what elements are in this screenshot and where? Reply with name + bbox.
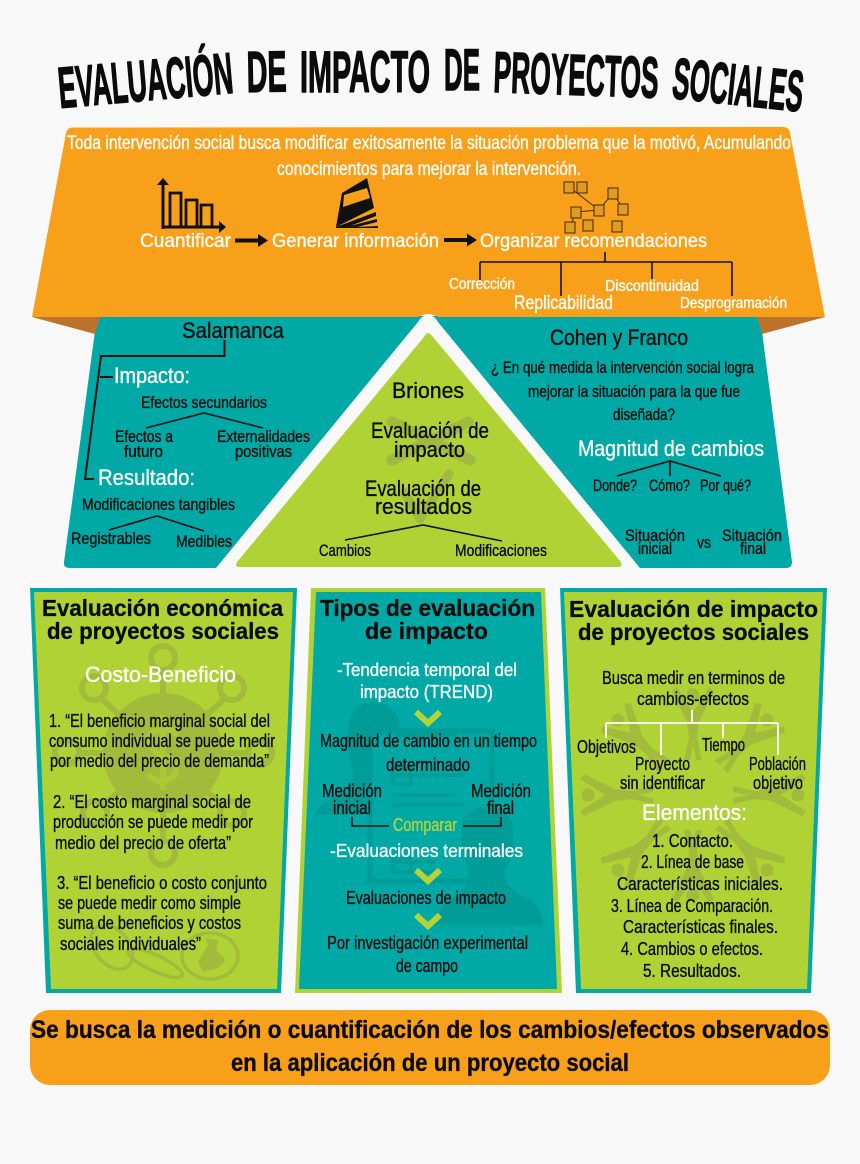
panel: Salamanca text: Modificaciones tangibles xyxy=(82,495,235,514)
heading: Tipos de evaluación xyxy=(320,595,535,621)
tree of factors: Población xyxy=(749,754,806,774)
panel: Salamanca text xyxy=(71,318,310,551)
icon: chevron xyxy=(416,915,440,926)
panel: Cohen y Franco text: vs xyxy=(697,533,711,552)
list item 2: 2. “El costo marginal social de xyxy=(53,792,251,812)
panel: Cohen y Franco text: Situación xyxy=(625,526,685,545)
icon: watermark check xyxy=(404,474,449,519)
icon: watermark people and document xyxy=(315,702,543,925)
elements list: 5. Resultados. xyxy=(643,961,741,981)
list item 2: medio del precio de oferta” xyxy=(55,833,231,853)
panel: Briones triangle: resultados xyxy=(375,494,472,519)
recommendations tree: Discontinuidad xyxy=(605,278,699,295)
panel: Cohen y Franco text: Magnitud de cambios xyxy=(578,436,764,461)
panel: Salamanca text: Registrables xyxy=(71,529,151,548)
panel: Briones triangle: Briones xyxy=(392,378,464,403)
text: investigacion experimental: Por investigación experimental xyxy=(327,933,528,953)
list item 1: 1. “El beneficio marginal social del xyxy=(49,711,270,731)
comparison diagram: Medición xyxy=(322,781,382,801)
panel: teal background with Salamanca and Cohen y Franco xyxy=(64,315,792,568)
comparison diagram xyxy=(322,781,531,835)
text: investigacion experimental: de campo xyxy=(396,956,458,976)
callout: bottom banner: en la aplicación de un proyecto social xyxy=(231,1049,629,1077)
title: DE xyxy=(246,39,287,105)
icon: network of documents xyxy=(564,182,628,233)
recommendations tree: Replicabilidad xyxy=(514,292,613,314)
heading xyxy=(569,596,818,645)
panel: Briones triangle: Modificaciones xyxy=(455,541,547,560)
list item 1: por medio del precio de demanda” xyxy=(50,751,269,771)
tree of factors: Tiempo xyxy=(702,735,745,755)
elements list: 1. Contacto. xyxy=(652,831,733,851)
heading: Evaluación económica xyxy=(42,595,283,621)
list item 3: se puede medir como simple xyxy=(58,893,241,913)
step: organizar recomendaciones: Organizar recomendaciones xyxy=(480,230,707,252)
list item 2 xyxy=(53,792,253,853)
intro text: cambios-efectos xyxy=(637,689,749,709)
panel: Cohen y Franco text: mejorar la situación para la que fue xyxy=(528,382,740,401)
panel: Salamanca text: futuro xyxy=(124,442,163,461)
tree of factors: objetivo xyxy=(753,773,803,793)
panel: Cohen y Franco text: Cohen y Franco xyxy=(550,325,688,350)
elements list: 3. Línea de Comparación. xyxy=(611,896,773,916)
arrow xyxy=(235,234,268,247)
text: evaluaciones de impacto: Evaluaciones de impacto xyxy=(346,888,506,908)
elements list: 2. Línea de base xyxy=(641,852,744,872)
icon: bar chart xyxy=(157,178,226,233)
panel: Cohen y Franco text: Por qué? xyxy=(700,476,751,495)
icon: watermark cross xyxy=(392,422,470,460)
heading: de proyectos sociales xyxy=(47,618,279,644)
heading xyxy=(320,595,535,644)
panel: Salamanca text: Medibles xyxy=(176,532,232,551)
comparison diagram: final xyxy=(487,798,514,818)
panel: Cohen y Franco text: Donde? xyxy=(593,476,637,495)
banner intro text xyxy=(67,132,791,180)
panel: Briones triangle: impacto xyxy=(394,437,465,462)
list item 3: sociales individuales” xyxy=(60,934,201,954)
title: IMPACTO xyxy=(300,40,430,105)
tree of factors: sin identificar xyxy=(620,773,705,793)
list item 3: suma de beneficios y costos xyxy=(58,913,241,933)
text: tendencia temporal xyxy=(337,660,517,702)
list item 1 xyxy=(49,711,275,771)
intro text xyxy=(602,668,785,709)
elements list xyxy=(611,831,783,981)
step: cuantificar: Cuantificar xyxy=(140,230,231,252)
title: PROYECTOS xyxy=(493,40,660,111)
subheading: Costo-Beneficio xyxy=(85,662,236,687)
heading xyxy=(42,595,283,644)
panel: Salamanca text: Efectos a xyxy=(115,427,173,446)
elements list: Características iniciales. xyxy=(617,874,783,894)
panel: Cohen y Franco text: final xyxy=(740,539,766,558)
title: EVALUACIÓN xyxy=(55,41,235,121)
heading: Evaluación de impacto xyxy=(569,596,818,622)
panel: Salamanca text: Efectos secundarios xyxy=(141,393,267,412)
panel: Cohen y Franco text: ¿ En qué medida la intervención social logra xyxy=(491,358,754,377)
panel: Salamanca text: Externalidades xyxy=(217,427,310,446)
intro text: Busca medir en terminos de xyxy=(602,668,785,688)
panel: Cohen y Franco text xyxy=(491,325,782,558)
panel: Cohen y Franco text: inicial xyxy=(638,539,672,558)
text: tendencia temporal: -Tendencia temporal del xyxy=(337,660,517,680)
text: evaluaciones terminales: -Evaluaciones terminales xyxy=(330,841,523,861)
comparison diagram: Comparar xyxy=(393,815,457,835)
panel: Salamanca text: Impacto: xyxy=(114,363,190,388)
banner intro text: conocimientos para mejorar la intervención. xyxy=(277,158,581,180)
panel: orange banner xyxy=(32,127,825,334)
text: tendencia temporal: impacto (TREND) xyxy=(360,682,493,702)
recommendations tree: Desprogramación xyxy=(680,295,787,312)
comparison diagram: Medición xyxy=(471,781,531,801)
subheading: Elementos: xyxy=(642,800,747,825)
callout: bottom banner xyxy=(30,1010,830,1085)
panel: Cohen y Franco text: Situación xyxy=(722,526,782,545)
panel: Briones triangle xyxy=(236,333,622,567)
panel: Salamanca text: positivas xyxy=(235,442,292,461)
panel: evaluacion de impacto xyxy=(560,588,827,993)
icon: chevron xyxy=(416,712,440,723)
icon: chevron xyxy=(416,870,440,881)
panel: Briones triangle: Evaluación de xyxy=(365,476,481,501)
tree of factors: Objetivos xyxy=(577,737,636,757)
title xyxy=(55,38,807,125)
comparison diagram: inicial xyxy=(333,798,371,818)
panel: Salamanca text: Salamanca xyxy=(182,318,285,343)
elements list: 4. Cambios o efectos. xyxy=(621,939,763,959)
panel: Cohen y Franco text: diseñada? xyxy=(613,405,675,424)
elements list: Características finales. xyxy=(623,917,778,937)
list item 2: producción se puede medir por xyxy=(53,812,253,832)
panel: Briones triangle: Cambios xyxy=(319,541,371,560)
icon: watermark circle of people xyxy=(580,687,806,903)
panel: Cohen y Franco text: Cómo? xyxy=(649,476,690,495)
text: magnitud de cambio: Magnitud de cambio en un tiempo xyxy=(320,731,537,751)
recommendations tree xyxy=(449,252,787,314)
panel: tipos de evaluacion xyxy=(295,588,562,993)
list item 1: consumo individual se puede medir xyxy=(49,731,275,751)
panel: Salamanca text: Resultado: xyxy=(98,465,195,490)
arrow xyxy=(444,234,477,246)
tree of factors: Proyecto xyxy=(635,754,690,774)
panel: Briones triangle: Evaluación de xyxy=(371,418,489,443)
heading: de proyectos sociales xyxy=(578,619,809,645)
panel: evaluacion economica xyxy=(30,588,297,993)
text: magnitud de cambio: determinado xyxy=(386,755,470,775)
icon: watermark coin network xyxy=(55,646,272,865)
text: magnitud de cambio xyxy=(320,731,537,775)
list item 3 xyxy=(57,873,267,954)
icon: watermark coins xyxy=(83,917,238,983)
heading: de impacto xyxy=(365,618,488,644)
step: generar informacion: Generar información xyxy=(272,230,439,252)
tree of factors xyxy=(577,710,806,793)
icon: book xyxy=(336,178,378,228)
title: DE xyxy=(444,38,480,103)
recommendations tree: Corrección xyxy=(449,276,515,293)
list item 3: 3. “El beneficio o costo conjunto xyxy=(57,873,267,893)
text: investigacion experimental xyxy=(327,933,528,976)
